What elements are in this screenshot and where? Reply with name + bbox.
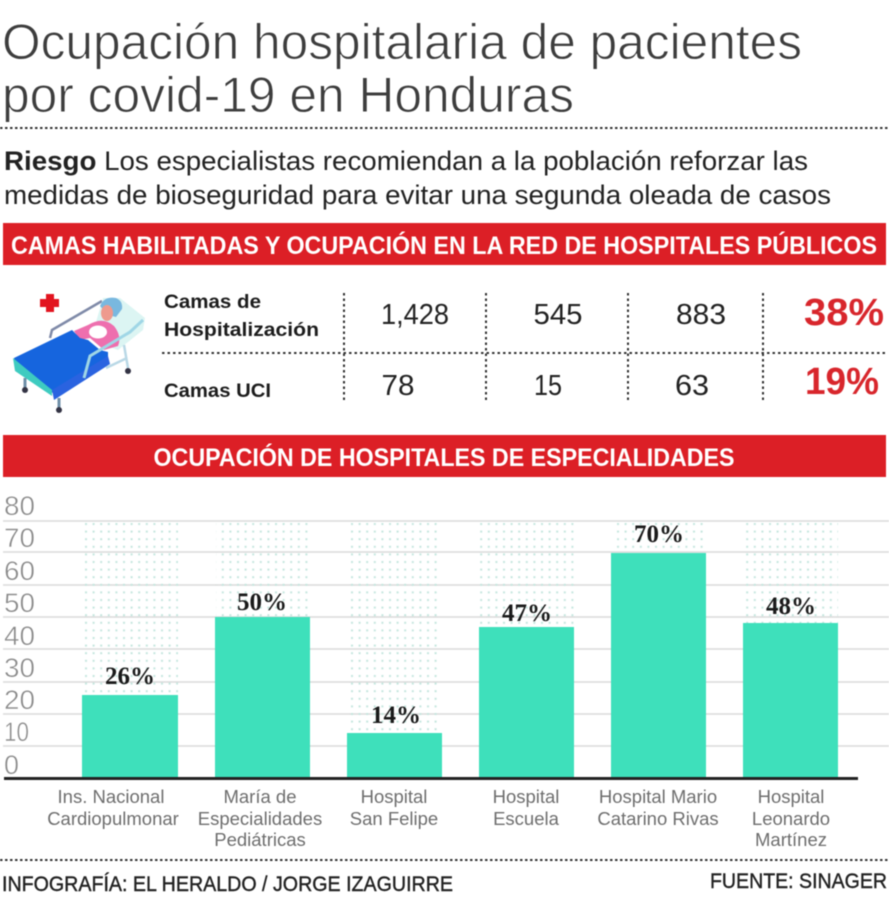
row: hospitalización values xyxy=(381,299,726,331)
y axis labels: 60 xyxy=(4,556,35,586)
bar value labels xyxy=(105,521,816,729)
row labels: Hospitalización xyxy=(164,319,319,341)
title: por covid-19 en Honduras xyxy=(2,66,574,123)
row: hospitalización values: 545 xyxy=(534,299,582,331)
percentages: 38% xyxy=(804,292,884,334)
percentages: 19% xyxy=(805,361,879,403)
row labels: Camas UCI xyxy=(164,380,271,402)
bar value labels: 47% xyxy=(502,600,552,627)
bar chart xyxy=(3,491,889,850)
y axis labels: 70 xyxy=(4,523,35,553)
subtitle text: Riesgo Los especialistas recomiendan a la población reforzar las xyxy=(4,146,808,176)
row: UCI values: 78 xyxy=(382,370,414,402)
y axis labels: 50 xyxy=(4,588,35,618)
category labels: Leonardo xyxy=(752,808,830,829)
row labels xyxy=(164,291,319,402)
category labels: Escuela xyxy=(493,808,560,829)
y axis labels xyxy=(4,491,35,780)
table: camas xyxy=(162,291,885,403)
bar value labels: 26% xyxy=(105,663,155,690)
category labels: Hospital xyxy=(758,786,824,807)
title xyxy=(2,13,802,123)
category labels: Ins. Nacional xyxy=(58,786,164,807)
bars xyxy=(82,553,838,778)
category labels: Hospital xyxy=(361,786,427,807)
dotted bar backgrounds xyxy=(84,522,838,733)
category labels: Hospital xyxy=(493,786,559,807)
y axis labels: 80 xyxy=(4,491,35,521)
row: hospitalización values: 1,428 xyxy=(381,299,449,331)
bar value labels: 48% xyxy=(766,593,816,620)
y axis labels: 20 xyxy=(4,685,35,715)
row labels: Camas de xyxy=(164,291,261,313)
category labels: Martínez xyxy=(755,829,827,850)
percentages xyxy=(804,292,884,403)
category labels: Hospital Mario xyxy=(599,786,717,807)
bar value labels: 14% xyxy=(371,702,421,729)
y axis labels: 10 xyxy=(4,717,29,747)
panel: red heading especialidades: OCUPACIÓN DE HOSPITALES DE ESPECIALIDADES xyxy=(154,442,734,472)
title: Ocupación hospitalaria de pacientes xyxy=(2,13,802,70)
category labels: Catarino Rivas xyxy=(597,808,719,829)
row: UCI values: 63 xyxy=(675,370,709,402)
panel: red heading especialidades xyxy=(3,435,886,477)
y axis labels: 0 xyxy=(4,750,19,780)
row: UCI values xyxy=(382,370,709,402)
row: UCI values: 15 xyxy=(534,370,562,402)
category labels: Cardiopulmonar xyxy=(47,808,179,829)
category labels: San Felipe xyxy=(350,808,438,829)
subtitle text: medidas de bioseguridad para evitar una segunda oleada de casos xyxy=(4,180,831,210)
panel: red heading camas habilitadas xyxy=(3,223,886,265)
category labels: María de xyxy=(223,786,297,807)
y axis labels: 40 xyxy=(4,621,35,651)
bar value labels: 50% xyxy=(237,589,287,616)
subtitle text xyxy=(4,146,831,210)
footer credit: INFOGRAFÍA: EL HERALDO / JORGE IZAGUIRRE xyxy=(2,873,453,896)
category labels xyxy=(47,786,830,850)
row: hospitalización values: 883 xyxy=(676,299,726,331)
category labels: Especialidades xyxy=(198,808,322,829)
y axis labels: 30 xyxy=(4,653,35,683)
bar value labels: 70% xyxy=(634,521,684,548)
category labels: Pediátricas xyxy=(214,829,306,850)
icon: hospital bed with patient xyxy=(13,294,145,413)
